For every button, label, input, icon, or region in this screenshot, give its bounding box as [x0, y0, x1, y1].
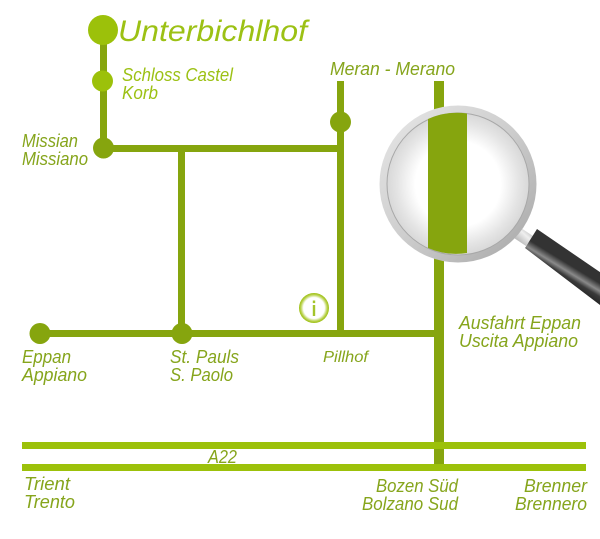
- label: Brenner Brennero: Brennero: [515, 494, 587, 514]
- label: Eppan Appiano: [21, 347, 87, 385]
- stop: Meran junction: [330, 112, 351, 132]
- label: Missian Missiano: [22, 131, 88, 169]
- label: Ausfahrt Eppan Uscita Appiano: Uscita Appiano: [459, 331, 578, 351]
- road network: [40, 30, 444, 465]
- label: A22: A22: [207, 447, 237, 467]
- label: Bozen Süd Bolzano Sud: Bozen Süd: [376, 476, 459, 496]
- label: St. Pauls S. Paolo: St. Pauls: [170, 347, 239, 367]
- label: Brenner Brennero: [515, 476, 588, 514]
- stop: Missian: [93, 138, 114, 158]
- label: Trient Trento: Trento: [24, 492, 75, 512]
- motorway A22: [22, 442, 586, 471]
- stop: St. Pauls: [172, 323, 192, 344]
- stop: Eppan: [30, 323, 50, 344]
- title: Unterbichlhof: [118, 15, 310, 48]
- label: St. Pauls S. Paolo: [170, 347, 239, 385]
- label: Schloss Castel Korb: Korb: [122, 83, 158, 103]
- label: Trient Trento: Trient: [24, 474, 71, 494]
- label: Bozen Süd Bolzano Sud: [362, 476, 459, 514]
- label: Schloss Castel Korb: [122, 65, 234, 103]
- label: Pillhof: Pillhof: [323, 349, 370, 366]
- label: Eppan Appiano: Eppan: [22, 347, 71, 367]
- icon: information: [299, 293, 329, 323]
- stop: Schloss Castel: [92, 70, 113, 92]
- label: Ausfahrt Eppan Uscita Appiano: Ausfahrt Eppan: [458, 313, 581, 333]
- label: Missian Missiano: Missiano: [22, 149, 88, 169]
- label: Schloss Castel Korb: Schloss Castel: [122, 65, 234, 85]
- label: Missian Missiano: Missian: [22, 131, 78, 151]
- label: Ausfahrt Eppan Uscita Appiano: [458, 313, 581, 351]
- label: Eppan Appiano: Appiano: [21, 365, 87, 385]
- label: Brenner Brennero: Brenner: [524, 476, 588, 496]
- label: St. Pauls S. Paolo: S. Paolo: [170, 365, 233, 385]
- label: Meran Merano: Meran - Merano: [330, 59, 455, 79]
- label: Bozen Süd Bolzano Sud: Bolzano Sud: [362, 494, 459, 514]
- stop: Unterbichlhof: [88, 15, 118, 45]
- label: Trient Trento: [24, 474, 75, 512]
- icon: magnifying glass: [380, 106, 600, 313]
